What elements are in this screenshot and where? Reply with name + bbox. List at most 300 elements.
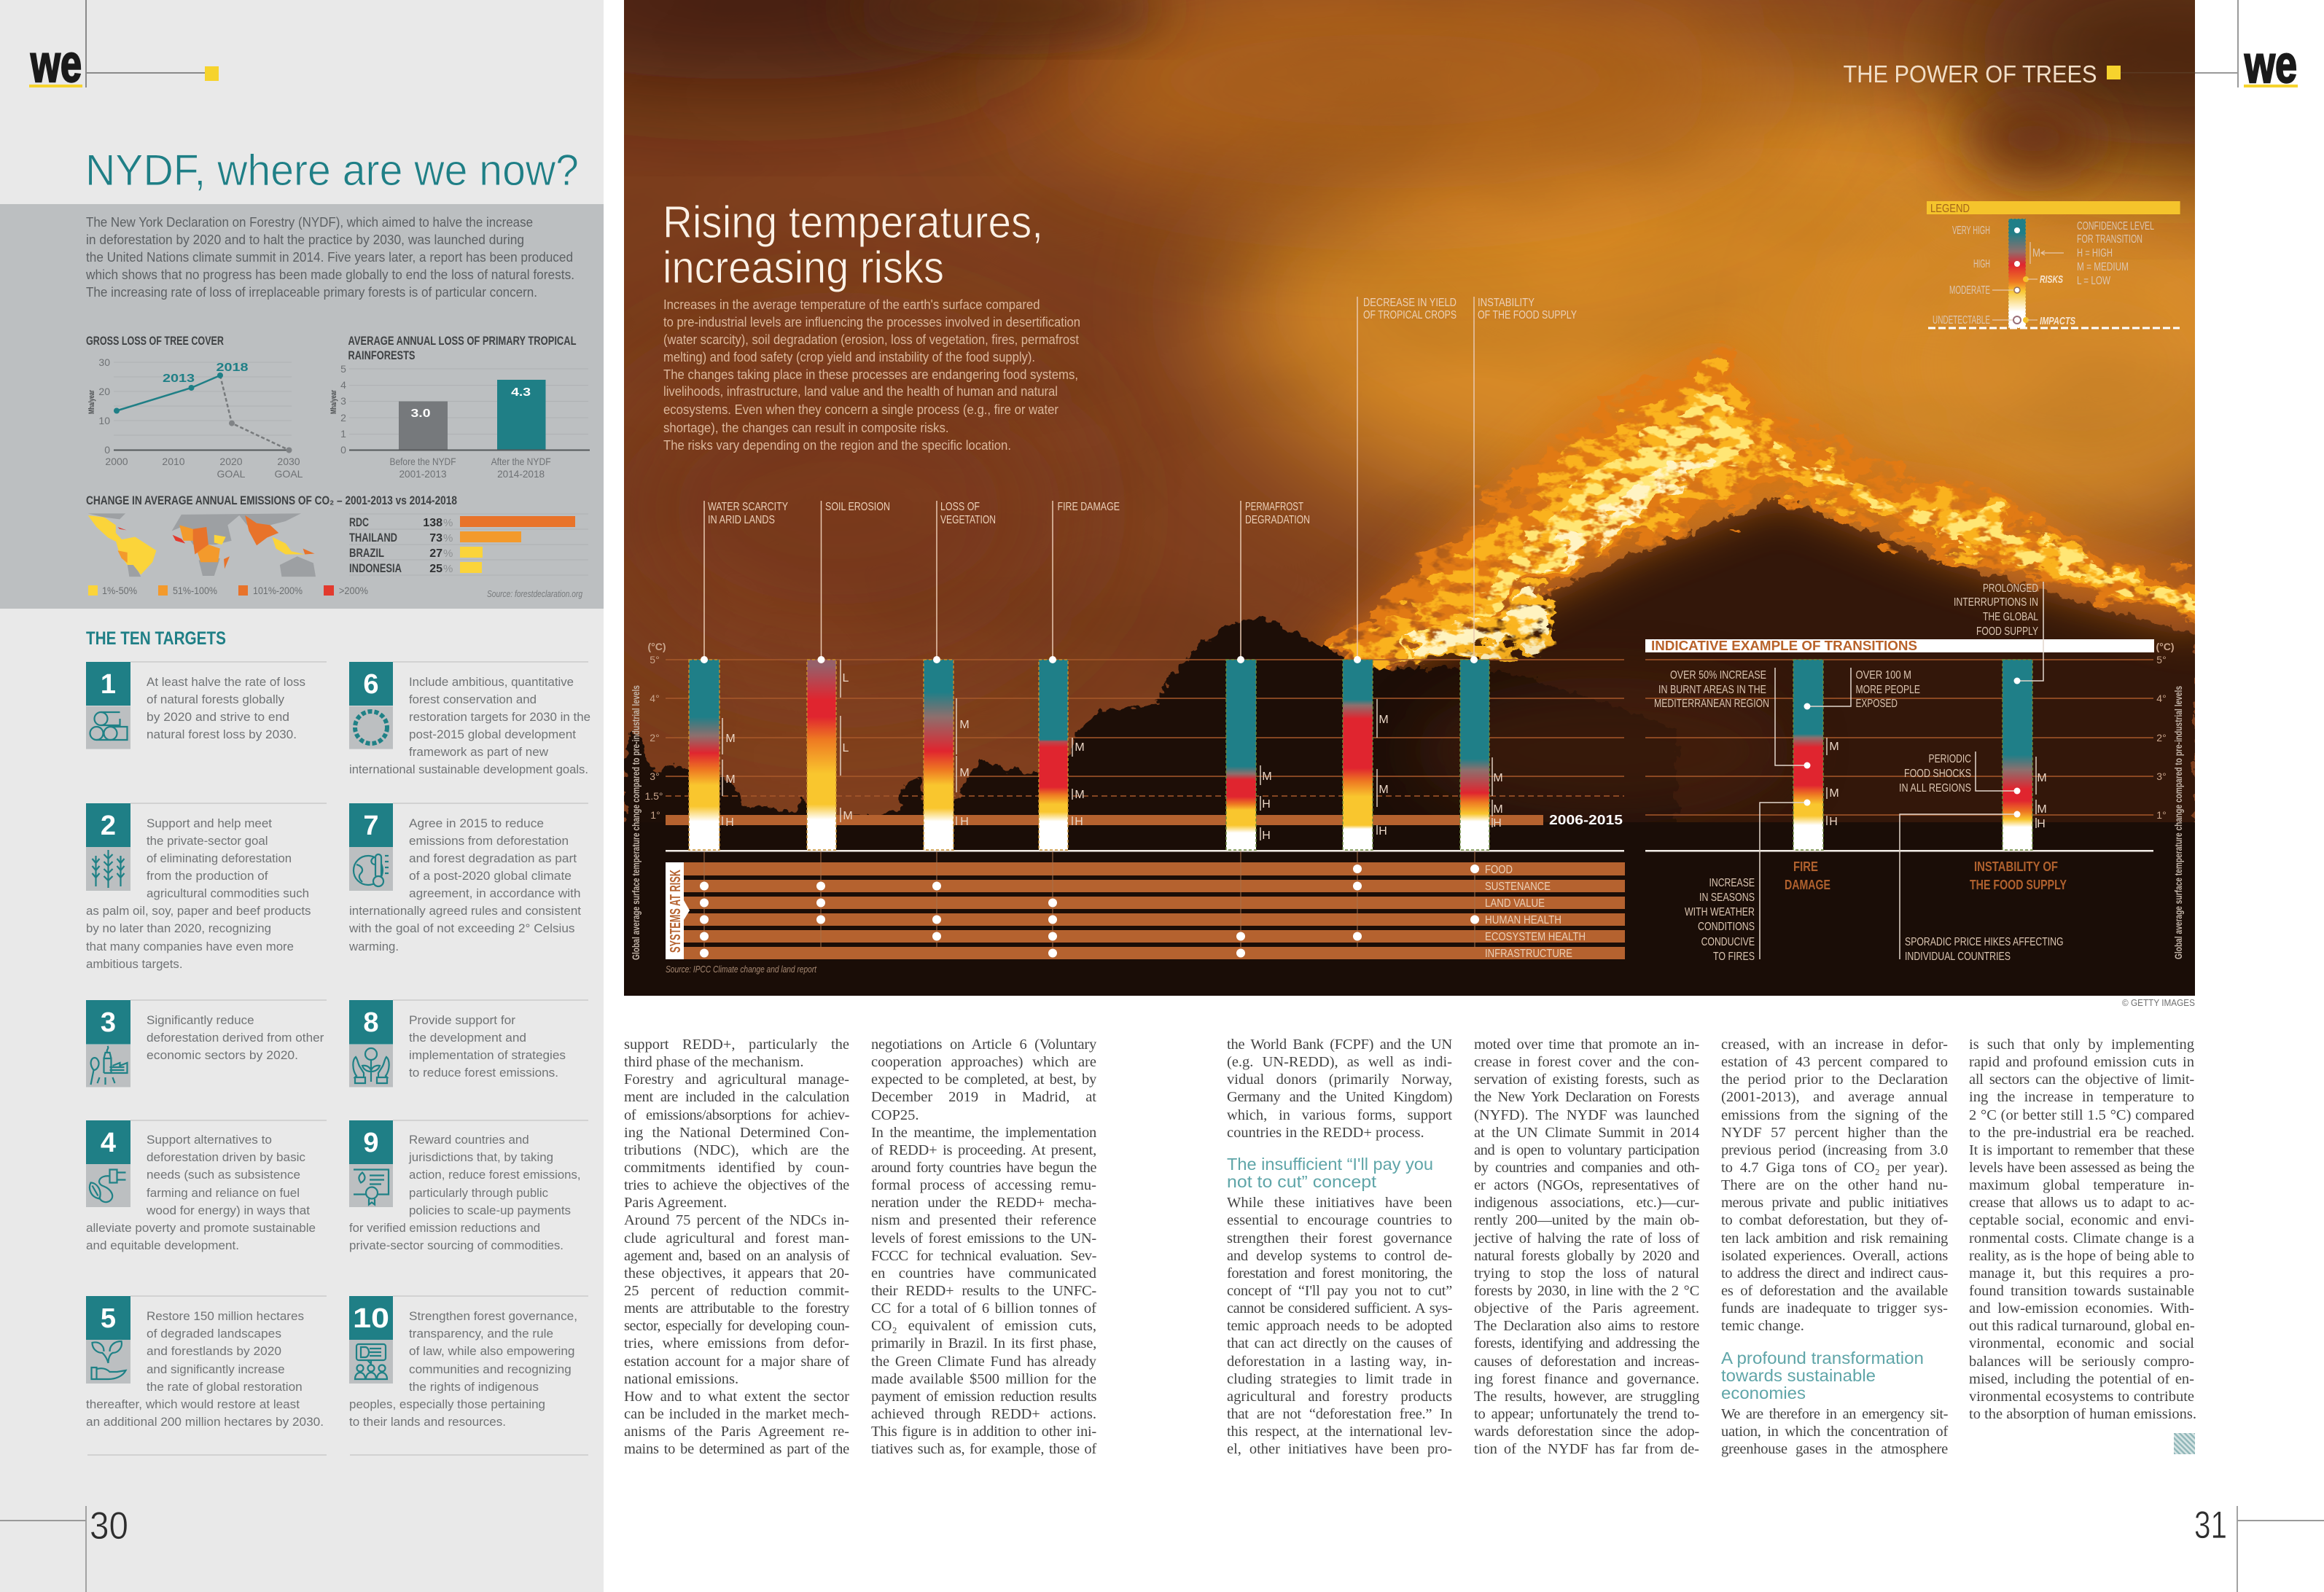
panel: grey data band [0,204,604,609]
article column 1: Paris Agreement. [624,1195,727,1211]
legend: HIGH [1973,258,1990,270]
transition bar: fire damage: TO FIRES [1713,951,1755,963]
text block: chart introduction: The changes taking place in these processes are endangering food systems, [663,367,1078,382]
legend: H = HIGH [2077,247,2113,260]
article column 1 [624,1037,850,1457]
chart: gross loss of tree cover: 2010 [162,456,185,467]
article column 1: ment are included in the calculation [624,1089,849,1105]
article column 4: by countries and companies and oth- [1474,1160,1699,1176]
target 7: of a post-2020 global climate [409,869,572,883]
article column 1: tries, where emissions from defor- [624,1335,849,1351]
target 2: of eliminating deforestation [147,851,292,865]
target 7: 7 [363,811,379,841]
article column 2: nism and presented their reference [871,1212,1096,1228]
target 7: agreement, in accordance with [409,886,580,900]
target 1: of natural forests globally [147,692,284,706]
transition bar: fire damage: DAMAGE [1785,878,1830,892]
target 10 [349,1295,588,1429]
target 9: jurisdictions that, by taking [408,1150,553,1164]
article column 1: these objectives, it appears that 20- [624,1265,849,1281]
legend: RISKS [2040,273,2063,286]
target 2: agricultural commodities such [147,886,309,900]
bar: water scarcity in arid lands [689,501,788,850]
target 5: an additional 200 million hectares by 2030. [86,1415,324,1429]
article column 5: estation of 43 percent compared to [1721,1054,1948,1070]
target 9: private-sector sourcing of commodities. [349,1238,564,1252]
legend: FOR TRANSITION [2077,233,2142,246]
chart: average annual loss of primary tropical rainforests: 3 [340,395,346,407]
article column 2: primarily in Brazil. In its first phase, [871,1335,1096,1351]
icon: wheat [92,850,124,888]
row labels [1485,864,1586,960]
text block: chart introduction: (water scarcity), soil degradation (erosion, loss of vegetation, fires, permafrost [663,332,1079,347]
transition bar: fire damage [1654,660,1920,963]
row labels: ECOSYSTEM HEALTH [1485,931,1586,943]
article column 4: ing forest finance and governance. [1474,1371,1699,1387]
transition bar: instability of the food supply: INSTABILITY OF [1974,859,2058,874]
chart: gross loss of tree cover: 2013 [163,372,195,385]
target 4: deforestation driven by basic [147,1150,305,1164]
target 8: Provide support for [409,1013,515,1027]
article column 2: payment of emission reduction results [871,1389,1096,1405]
chart axis left: 1° [650,809,660,821]
bar: instability of the food supply: M [1493,772,1503,784]
transition bar: fire damage: M [1829,787,1839,800]
transition bar: fire damage: MEDITERRANEAN REGION [1654,698,1769,710]
bar: permafrost degradation: H [1262,798,1271,811]
article column 3: concept of “I'll pay you not to cut” [1227,1283,1452,1299]
article column 3: temic approach needs to be adopted [1227,1318,1452,1334]
chart axis left: 4° [650,692,660,704]
bar: permafrost degradation [1226,501,1310,850]
article column 4: forests by 2030, in line with the 2 °C [1474,1283,1699,1299]
target 9: particularly through public [409,1186,548,1200]
article column 2: neration under the REDD+ mecha- [871,1195,1096,1211]
article column 2: their REDD+ results to the UNFC- [871,1283,1096,1299]
text block: chart introduction: to pre-industrial levels are influencing the processes involved in desertification [663,315,1080,329]
icon: factory and plant [90,1046,127,1085]
target 6: post-2015 global development [409,727,576,741]
article column 3: the World Bank (FCPF) and the UN [1227,1037,1452,1053]
article column 5: to 4.7 Giga tons of CO₂ per year). [1721,1160,1948,1176]
article column 5: es of deforestation and the available [1721,1283,1948,1299]
panel: left page background [0,0,604,1592]
legend [1927,201,2180,328]
chart: gross loss of tree cover: GOAL [275,468,303,480]
target 6: framework as part of new [409,745,549,759]
chart: gross loss of tree cover: 2020 [219,456,243,467]
target 10: transparency, and the rule [409,1327,553,1341]
bar: decrease in yield of tropical crops: OF TROPICAL CROPS [1363,309,1457,321]
legend: M = MEDIUM [2077,261,2129,273]
chart: gross loss of tree cover [86,334,303,480]
bar: soil erosion: L [843,672,849,684]
chart grid: temperature levels [666,660,2153,815]
article column 1: Forestry and agricultural manage- [624,1072,849,1088]
article column 1: can be included in the market mech- [624,1406,849,1422]
transition bar: fire damage: WITH WEATHER [1685,906,1755,918]
map legend [88,585,368,596]
target 1 [86,661,327,749]
article column 6 [1969,1037,2196,1422]
transition bar: instability of the food supply: M [2037,772,2047,784]
heading [348,334,576,362]
article column 1: third phase of the mechanism. [624,1054,804,1070]
article column 2: COP25. [871,1107,919,1123]
transition bar: instability of the food supply: SPORADIC PRICE HIKES AFFECTING [1905,936,2064,948]
article column 3: agricultural and forestry products [1227,1389,1452,1405]
chart axis right: 4° [2156,692,2167,704]
panel: fire photograph background [624,0,2195,996]
article column 1: anisms of the Paris Agreement re- [624,1424,849,1440]
chart: gross loss of tree cover: 20 [98,386,110,397]
logo: we: we [30,35,82,93]
chart: average annual loss of primary tropical rainforests: 2 [340,412,346,424]
article column 6: rapid and profound emission cuts in [1969,1054,2194,1070]
article column 3: cluding strategies to limit trade in [1227,1371,1452,1387]
transition bar: instability of the food supply: M [2037,803,2047,816]
bar: soil erosion: SOIL EROSION [825,501,890,513]
target 4: and equitable development. [86,1238,239,1252]
icon: hands with coin and sprout [353,1048,389,1083]
transition bar: fire damage: H [1829,816,1838,828]
subheading: a profound transformation: economies [1721,1384,1806,1402]
target 9: policies to scale-up payments [409,1203,571,1217]
article column 1: ing the National Determined Con- [624,1125,849,1141]
article column 5: We are therefore in an emergency sit- [1721,1406,1948,1422]
text block: NYDF introduction: which shows that no progress has been made globally to end the loss of natural forests. [85,268,574,282]
bar: soil erosion: L [843,742,849,754]
transition bar: fire damage: OVER 100 M [1856,669,1911,682]
article column 4: The results, however, are struggling [1474,1389,1699,1405]
article column 4: objective of the Paris agreement. [1474,1300,1699,1316]
target 8: 8 [363,1007,379,1038]
article column 2 [871,1037,1096,1457]
article column 5: isolated experiences. Overall, actions [1721,1248,1948,1264]
transition bar: fire damage: MORE PEOPLE [1856,684,1920,696]
article column 6: is such that only by implementing [1969,1037,2194,1053]
article column 2: cooperation approaches) which are [871,1054,1096,1070]
article column 5: NYDF 57 percent higher than the [1721,1125,1948,1141]
chart: average annual loss of primary tropical rainforests: 2001-2013 [399,468,447,480]
target 1: by 2020 and strive to end [147,710,289,724]
article column 2: the Green Climate Fund has already [871,1354,1096,1370]
chart: gross loss of tree cover: 10 [98,415,110,426]
photo credit: © GETTY IMAGES [2122,997,2195,1008]
article column 4: trying to stop the loss of natural [1474,1265,1699,1281]
row labels: FOOD [1485,864,1513,876]
article column 3: which, in various forms, support [1227,1107,1452,1123]
icon: ring [355,711,387,744]
text block: NYDF introduction: the United Nations climate summit in 2014. Five years later, a report has been produced [86,250,573,265]
fire glow and flames [1305,348,2209,667]
subheading: the insufficient concept: not to cut” concept [1227,1172,1377,1191]
article column 6: found transition towards sustainable [1969,1283,2194,1299]
chart: average annual loss of primary tropical rainforests: 2014-2018 [497,468,545,480]
heading: RAINFORESTS [348,348,416,362]
bar: soil erosion: M [843,810,853,822]
target 10: peoples, especially those pertaining [349,1397,545,1411]
article column 3: strengthen their forest governance [1227,1230,1452,1246]
bar: permafrost degradation: DEGRADATION [1245,514,1310,526]
target 3: deforestation derived from other [147,1031,324,1045]
chart axis right: 5° [2156,654,2167,666]
target 2: 2 [101,811,116,841]
chart: gross loss of tree cover: 0 [104,444,110,456]
article column 3: that are not “deforestation free.” In [1227,1406,1452,1422]
table: emissions change by country: 27 [429,547,442,560]
article column 4: (NYFD). The NYDF was launched [1474,1107,1699,1123]
chart: average annual loss of primary tropical rainforests [330,334,590,480]
chart: gross loss of tree cover: 2018 [216,362,249,374]
target 9: for verified emission reductions and [349,1221,540,1235]
article column 5: creased, with an increase in defor- [1721,1037,1948,1053]
article column 1: mains to be determined as part of the [624,1441,849,1457]
header right: crop lines and logo: we [2244,36,2297,94]
chart: average annual loss of primary tropical rainforests: 1 [340,428,346,440]
legend: UNDETECTABLE [1933,314,1990,327]
text block: NYDF introduction [85,215,574,300]
chart axis right: (°C) [2156,641,2175,652]
legend: VERY HIGH [1952,225,1990,237]
bar: water scarcity in arid lands: WATER SCARCITY [708,501,788,513]
target 6 [349,661,590,776]
baseline rules [666,850,2153,851]
target 8 [349,999,588,1087]
article column 4: to appear; unfortunately the trend to- [1474,1406,1699,1422]
bar: fire damage: M [1075,789,1085,801]
target 9 [349,1120,588,1252]
target 4: 4 [101,1128,116,1158]
target 7: with the goal of not exceeding 2° Celsius [348,921,574,935]
target 7: and forest degradation as part [409,851,577,865]
table: emissions change by country: 73 [429,532,442,545]
row labels: LAND VALUE [1485,897,1545,910]
text block: chart introduction: Increases in the average temperature of the earth's surface compared [663,297,1040,312]
article column 5: uation, in which the concentration of [1721,1424,1948,1440]
map legend: >200% [339,585,368,596]
header right: crop lines and logo [2121,0,2298,94]
article column 3: that can act directly on the causes of [1227,1335,1452,1351]
bar: loss of vegetation: H [960,816,969,828]
target 2: as palm oil, soy, paper and beef products [86,904,311,918]
heading band: indicative example of transitions: INDICATIVE EXAMPLE OF TRANSITIONS [1651,639,1917,653]
chart: average annual loss of primary tropical rainforests: 5 [340,363,346,375]
article column 6: to the pre-industrial era be reached. [1969,1125,2194,1141]
article column 2: of REDD+ is proceeding. At present, [871,1142,1096,1158]
article column 1: ments are attributable to the forestry [624,1300,849,1316]
article column 3: this respect, at the international lev- [1227,1424,1452,1440]
target 3: Significantly reduce [147,1013,254,1027]
bar: permafrost degradation: H [1262,830,1271,842]
article column 6: reality, as is the hope of being able to [1969,1248,2194,1264]
article column 6: crease that allows us to adapt to ac- [1969,1195,2194,1211]
table: emissions change by country: % [443,517,453,529]
target 1: natural forest loss by 2030. [147,727,297,741]
target 1: At least halve the rate of loss [147,675,305,689]
bar: instability of the food supply: H [1493,817,1502,830]
article column 3: forestation and forest monitoring, the [1227,1265,1452,1281]
heading band: indicative example of transitions [1645,639,2154,653]
bar: fire damage: M [1075,741,1085,754]
target 5: and significantly increase [147,1362,285,1376]
chart: gross loss of tree cover: 2030 [277,456,300,467]
headline: rising temperatures: increasing risks [663,243,944,293]
table: emissions change by country: % [443,547,453,560]
chart axis left: (°C) [647,641,666,652]
target 10: the rights of indigenous [409,1380,539,1394]
icon: yellow marker [205,66,219,81]
target 5: and forestlands by 2020 [147,1344,281,1358]
end mark: hatched square [2174,1433,2195,1454]
icon: logs [90,712,127,740]
article column 1: 25 percent of reduction commit- [624,1283,849,1299]
icon: plant on hand [92,1341,125,1379]
legend: MODERATE [1949,284,1990,297]
chart: gross loss of tree cover: 2000 [105,456,128,467]
transition bar: fire damage: OVER 50% INCREASE [1670,669,1766,682]
bar: loss of vegetation [924,501,996,850]
section tag: the power of trees: THE POWER OF TREES [1843,61,2097,87]
article column 2: December 2019 in Madrid, at [871,1089,1096,1105]
article column 1: tries to achieve the objectives of the [624,1177,849,1193]
chart: average annual loss of primary tropical rainforests: 4.3 [511,386,531,399]
chart: gross loss of tree cover: GOAL [217,468,246,480]
icon: plug and leaf [90,1169,125,1202]
legend: L = LOW [2077,275,2111,287]
transition bar: fire damage: M [1829,741,1839,753]
title: NYDF, where are we now?: NYDF, where are we now? [85,146,579,195]
article column 4: rently 200—united by the main ob- [1474,1212,1699,1228]
article column 6: vironmental ecosystems to contribute [1969,1389,2194,1405]
transition bar: instability of the food supply: PROLONGED [1983,582,2038,595]
target 5: of degraded landscapes [147,1327,281,1341]
chart axis left: Global average surface temperature change compared to pre-industrial levels [631,685,642,960]
article column 5 [1721,1037,1948,1457]
heading: GROSS LOSS OF TREE COVER [86,334,224,348]
article column 2: levels of forest emissions to the UN- [871,1230,1096,1246]
transition bar: instability of the food supply: FOOD SUPPLY [1976,625,2038,638]
article column 6: levels have been assessed as being the [1969,1160,2194,1176]
heading: change in emissions: CHANGE IN AVERAGE ANNUAL EMISSIONS OF CO₂ – 2001-2013 vs 2014-2018 [86,493,457,507]
article column 4: indigenous associations, etc.)—cur- [1474,1195,1699,1211]
article column 4: causes of deforestation and increas- [1474,1354,1699,1370]
bar: water scarcity in arid lands: M [725,773,736,786]
article column 6: ing the increase in temperature to [1969,1089,2194,1105]
article column 1: sector, especially for developing coun- [624,1318,849,1334]
article column 3: essential to encourage countries to [1227,1212,1452,1228]
bar: instability of the food supply [1460,297,1577,850]
target 4 [86,1120,327,1252]
systems at risk rows [666,851,1625,960]
article column 3: While these initiatives have been [1227,1195,1452,1211]
chart: average annual loss of primary tropical rainforests: 4 [340,379,346,391]
target 5: 5 [101,1303,116,1334]
bar: decrease in yield of tropical crops: M [1379,784,1389,796]
heading: the ten targets: THE TEN TARGETS [86,628,226,649]
article column 6: vironmental, economic and social [1969,1335,2194,1351]
target 8: the development and [409,1031,526,1045]
target 2: the private-sector goal [147,834,268,848]
bar: loss of vegetation: M [959,719,970,731]
transition bar: instability of the food supply: THE GLOBAL [1983,611,2038,623]
chart axis left: 1.5° [644,790,663,802]
chart: average annual loss of primary tropical rainforests: Before the NYDF [389,456,456,467]
transition bar: instability of the food supply: H [2037,818,2046,830]
headline: rising temperatures: Rising temperatures, [663,198,1043,248]
article column 5: funds are inadequate to trigger sys- [1721,1300,1948,1316]
article column 6: manage it, but this requires a pro- [1969,1265,2194,1281]
target 2: by no later than 2020, recognizing [86,921,271,935]
bar: soil erosion [807,501,890,850]
map legend: 101%-200% [253,585,303,596]
article column 1: agement and, based on an analysis of [624,1248,849,1264]
transition bar: instability of the food supply: IN ALL REGIONS [1899,782,1971,795]
article column 6: all sectors can the objective of limit- [1969,1072,2194,1088]
transition bar: instability of the food supply: INDIVIDUAL COUNTRIES [1905,951,2011,963]
article column 1: national emissions. [624,1371,738,1387]
article column 6: out this radical turnaround, global en- [1969,1318,2195,1334]
target 9: 9 [363,1128,379,1158]
target 6: 6 [363,669,379,700]
article column 1: clude agricultural and forest man- [624,1230,849,1246]
world map of emissions change [88,513,316,577]
dark hill [1394,496,2195,822]
target 5: the rate of global restoration [147,1380,303,1394]
article column 3: el, other initiatives have been pro- [1227,1441,1452,1457]
target 3: economic sectors by 2020. [147,1048,298,1062]
band: 2006-2015 observed period: 2006-2015 [1549,813,1623,827]
footer left: rules and page number 30: 30 [90,1505,128,1548]
table: emissions change by country: RDC [349,515,369,529]
target 5: thereafter, which would restore at least [86,1397,300,1411]
article column 5: There are on the other hand nu- [1721,1177,1948,1193]
target 2: Support and help meet [147,816,272,830]
source note: Source: forestdeclaration.org [487,589,582,599]
target 6: Include ambitious, quantitative [409,675,574,689]
target 4: farming and reliance on fuel [147,1186,300,1200]
article column 2: achieved through REDD+ actions. [871,1406,1096,1422]
article column 6: balances will be seriously compro- [1969,1354,2194,1370]
article column 4: at the UN Climate Summit in 2014 [1474,1125,1699,1141]
bar: decrease in yield of tropical crops [1343,297,1457,850]
text block: chart introduction: melting) and food safety (crop yield and instability of the food supply). [663,350,1035,364]
target 7: emissions from deforestation [409,834,569,848]
table: emissions change by country: THAILAND [349,531,397,545]
article column 4 [1473,1037,1700,1457]
article column 3: cannot be considered sufficient. A sys- [1227,1300,1452,1316]
text block: chart introduction: ecosystems. Even when they concern a single process (e.g., fire or water [663,402,1058,417]
bar: decrease in yield of tropical crops: DECREASE IN YIELD [1363,297,1457,309]
text block: NYDF introduction: The increasing rate of loss of irreplaceable primary forests is of particular concern. [86,285,537,300]
article column 6: maximum global temperature in- [1969,1177,2194,1193]
article column 4: the New York Declaration on Forests [1474,1089,1699,1105]
article column 1: commitments identified by coun- [624,1160,849,1176]
icon: certificate with leaf [354,1169,389,1204]
map legend: 51%-100% [173,585,217,596]
label tab: systems at risk [666,862,690,959]
chart: gross loss of tree cover: Mha/year [87,390,96,414]
target 6: restoration targets for 2030 in the [409,710,590,724]
article column 4: forests, identifying and addressing the [1474,1335,1699,1351]
transition bar: fire damage: CONDITIONS [1698,921,1755,933]
chart: average annual loss of primary tropical rainforests: 3.0 [411,407,431,420]
article column 2: CC for a total of 6 billion tonnes of [871,1300,1096,1316]
row labels: SUSTENANCE [1485,881,1551,893]
bar: instability of the food supply: INSTABILITY [1478,297,1535,309]
transition bar: fire damage: CONDUCIVE [1701,936,1755,948]
transition bar: instability of the food supply: PERIODIC [1929,753,1971,765]
